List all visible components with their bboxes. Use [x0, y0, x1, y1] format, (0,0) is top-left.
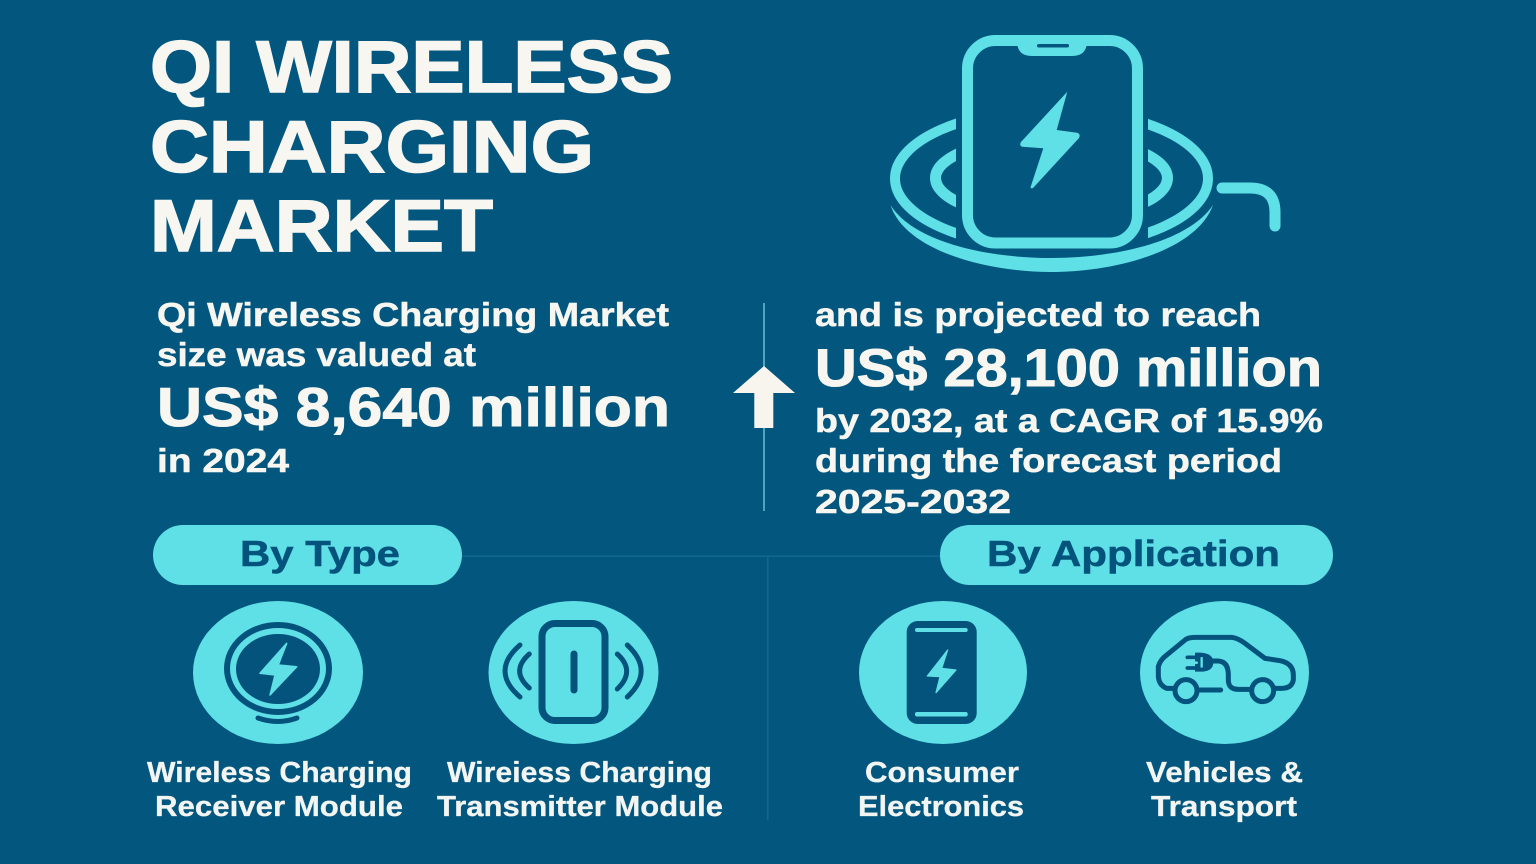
- text block: 2024 market value: US$ 8,640 million: [157, 376, 670, 438]
- label: vehicles and transport: [1146, 757, 1303, 823]
- pill heading: By Type: [153, 525, 462, 585]
- label: consumer electronics: Consumer: [865, 757, 1019, 789]
- title: QI WIRELESS: [150, 27, 673, 108]
- label: wireless charging transmitter module: [437, 757, 723, 823]
- label: wireless charging transmitter module: Wireiess Charging: [447, 757, 712, 789]
- label: vehicles and transport: Transport: [1151, 791, 1297, 823]
- text block: 2024 market value: size was valued at: [157, 336, 476, 373]
- label: wireless charging receiver module: Wireless Charging: [147, 757, 412, 789]
- text block: 2032 projection: by 2032, at a CAGR of 15.9%: [815, 402, 1323, 439]
- label: consumer electronics: Electronics: [858, 791, 1024, 823]
- label: consumer electronics: [858, 757, 1024, 823]
- icon: consumer electronics smartphone: [859, 601, 1027, 744]
- divider with growth arrow: [733, 303, 795, 511]
- segment connector lines: [462, 556, 940, 820]
- icon: wireless charging transmitter module: [488, 601, 658, 744]
- title: CHARGING: [150, 107, 594, 188]
- pill heading: By Application: [940, 525, 1333, 585]
- text block: 2032 projection: [815, 296, 1323, 520]
- label: wireless charging receiver module: [147, 757, 412, 823]
- pill heading: By Type: By Type: [240, 533, 400, 574]
- title: MARKET: [150, 186, 493, 267]
- text block: 2032 projection: US$ 28,100 million: [815, 339, 1322, 398]
- label: wireless charging transmitter module: Transmitter Module: [437, 791, 723, 823]
- icon: phone on wireless charging pad: [890, 36, 1275, 272]
- text block: 2024 market value: Qi Wireless Charging Market: [157, 296, 669, 333]
- label: wireless charging receiver module: Receiver Module: [155, 791, 403, 823]
- text block: 2024 market value: in 2024: [157, 442, 290, 479]
- icon: wireless charging receiver module: [193, 601, 363, 744]
- label: vehicles and transport: Vehicles &: [1146, 757, 1303, 789]
- text block: 2032 projection: during the forecast period: [815, 442, 1282, 479]
- icon: electric vehicle with plug: [1140, 601, 1309, 744]
- text block: 2032 projection: and is projected to reach: [815, 296, 1261, 333]
- text block: 2032 projection: 2025-2032: [815, 483, 1011, 520]
- title: [150, 27, 673, 267]
- pill heading: By Application: By Application: [987, 533, 1280, 574]
- text block: 2024 market value: [157, 296, 670, 479]
